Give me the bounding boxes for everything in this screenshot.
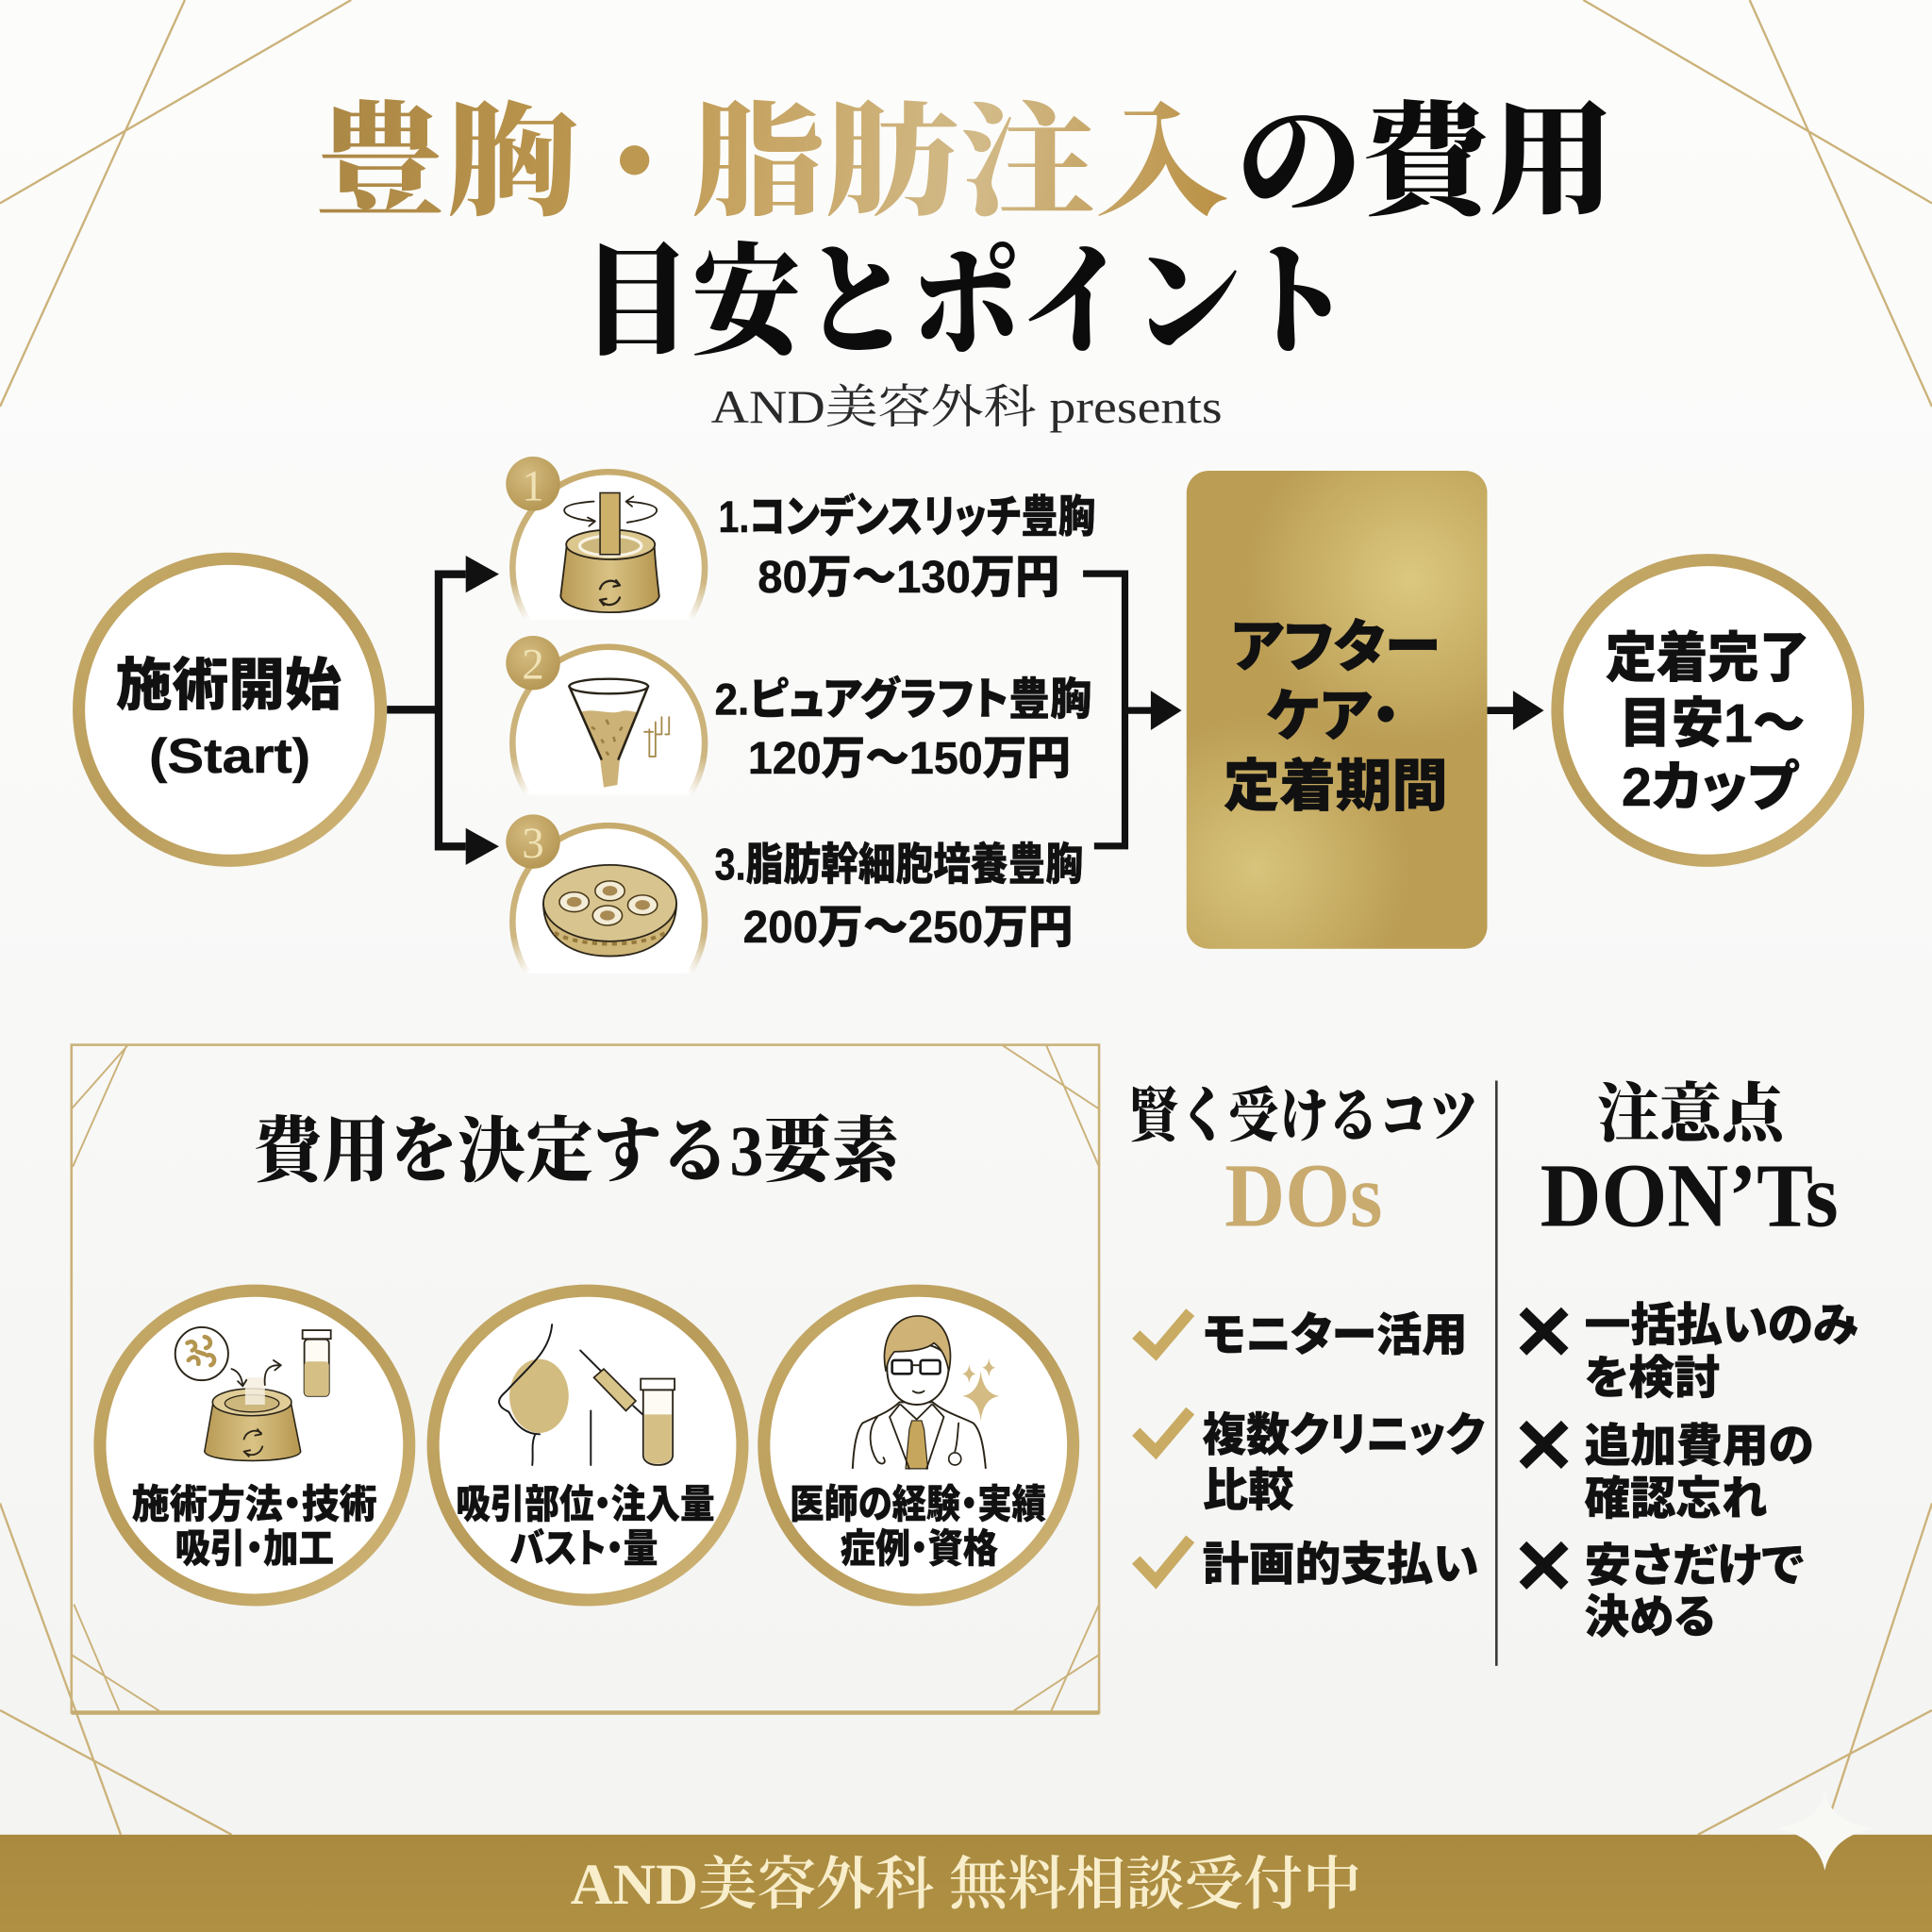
caution 3: 安さだけで [1585,1541,1804,1591]
tip 2 [1136,1409,1485,1516]
panel: three cost factors [72,1045,1099,1713]
tip 3: 計画的支払い [1203,1539,1478,1590]
label 3: 3.脂肪幹細胞培養豊胸 [715,840,1083,890]
icon: centrifuge [560,492,659,612]
label 3: 200万〜250万円 [743,902,1074,953]
factor 1 label [132,1482,377,1571]
tip 2: 比較 [1203,1465,1293,1516]
DON'Ts heading: 注意点 [1597,1078,1790,1150]
icon: funnel filter [569,679,669,788]
label 2: 2.ピュアグラフト豊胸 [715,675,1091,724]
label 1: 80万〜130万円 [758,552,1059,603]
factor 2 label: バスト・量 [509,1526,658,1571]
aftercare card: 定着期間 [1224,755,1448,818]
arrow to method 1 [466,556,499,592]
title line 1 gold: breast: 豊胸 [314,96,579,232]
factor 3 label: 医師の経験・実績 [790,1482,1046,1526]
arch 2 [509,643,708,792]
DOs heading: DOs [1224,1145,1382,1246]
factor 1 [100,1291,409,1600]
factor 1 label: 施術方法・技術 [132,1482,377,1526]
start node: 施術開始 [116,654,341,717]
title [314,96,1615,370]
start node [79,558,381,860]
title line 1 gold: separator dot [620,145,649,175]
badge 2: 2 [522,641,544,690]
badge 3 [506,814,560,869]
icon: fat processing [175,1327,331,1460]
label 2 [715,675,1091,784]
branch connector from start [387,575,466,846]
completion node: 2カップ [1622,758,1800,818]
flow diagram connectors [387,556,1544,865]
aftercare card [1187,471,1487,949]
tip 2: 複数クリニック [1203,1409,1485,1460]
method 3: stem cell culture [506,814,1082,971]
arrow to aftercare [1151,691,1182,730]
panel heading: 費用を決定する3要素 [254,1112,902,1191]
caution 1 [1523,1300,1858,1404]
subtitle: AND美容外科 presents [711,381,1223,433]
start node: (Start) [149,729,310,784]
method 1: condense rich [506,457,1094,617]
title line 1 black: の費用 [1236,96,1615,232]
panel: DON'Ts [1523,1078,1858,1643]
title line 2: 目安とポイント [581,236,1351,370]
method 2: pure graft [506,636,1091,792]
factor 2 label [456,1482,715,1571]
label 1 [718,491,1095,603]
column divider [1495,1080,1497,1666]
label 2: 120万〜150万円 [748,733,1071,784]
panel frame [72,1045,1099,1713]
footer band: AND美容外科 無料相談受付中 [571,1853,1361,1917]
completion node [1557,560,1858,860]
DOs heading: 賢く受けるコツ [1128,1083,1478,1149]
panel: DOs [1128,1083,1485,1590]
arch 1 [509,469,708,617]
arch 3 [509,823,708,971]
badge 1 [506,457,560,511]
icon: sparkle watermark [1775,1789,1874,1871]
badge 3: 3 [522,819,544,868]
arrow to completion [1487,708,1518,713]
aftercare card: ケア・ [1267,685,1400,748]
caution 2 [1523,1421,1814,1524]
factor 2 [433,1291,742,1600]
badge 1: 1 [522,461,544,510]
footer band [0,1835,1932,1932]
icon: petri dish [543,865,676,957]
DOs heading [1128,1083,1478,1246]
aftercare card: アフター [1231,616,1441,679]
tip 1: モニター活用 [1203,1310,1468,1361]
label 3 [715,840,1083,953]
caution 3 [1523,1541,1804,1643]
arrow to method 3 [466,828,499,865]
factor 3 [764,1291,1074,1600]
DON'Ts heading [1541,1078,1839,1246]
icon: breast and syringe [499,1324,675,1465]
badge 2 [506,636,560,690]
DON'Ts heading: DON’Ts [1541,1145,1839,1246]
caution 3: 決める [1585,1592,1715,1643]
completion node: 目安1〜 [1619,693,1805,754]
factor 1 label: 吸引・加工 [175,1526,334,1571]
caution 2: 確認忘れ [1585,1474,1767,1524]
factor 3 label: 症例・資格 [841,1526,998,1571]
title line 1 gold: fat injection: 脂肪注入 [690,96,1230,232]
caution 2: 追加費用の [1585,1421,1814,1472]
icon: doctor [853,1316,999,1469]
merge connector [1083,574,1154,846]
label 1: 1.コンデンスリッチ豊胸 [718,491,1095,541]
completion node: 定着完了 [1606,628,1810,689]
caution 1: を検討 [1585,1353,1720,1404]
factor 2 label: 吸引部位・注入量 [456,1482,715,1526]
factor 3 label [790,1482,1046,1571]
caution 1: 一括払いのみ [1585,1300,1858,1351]
